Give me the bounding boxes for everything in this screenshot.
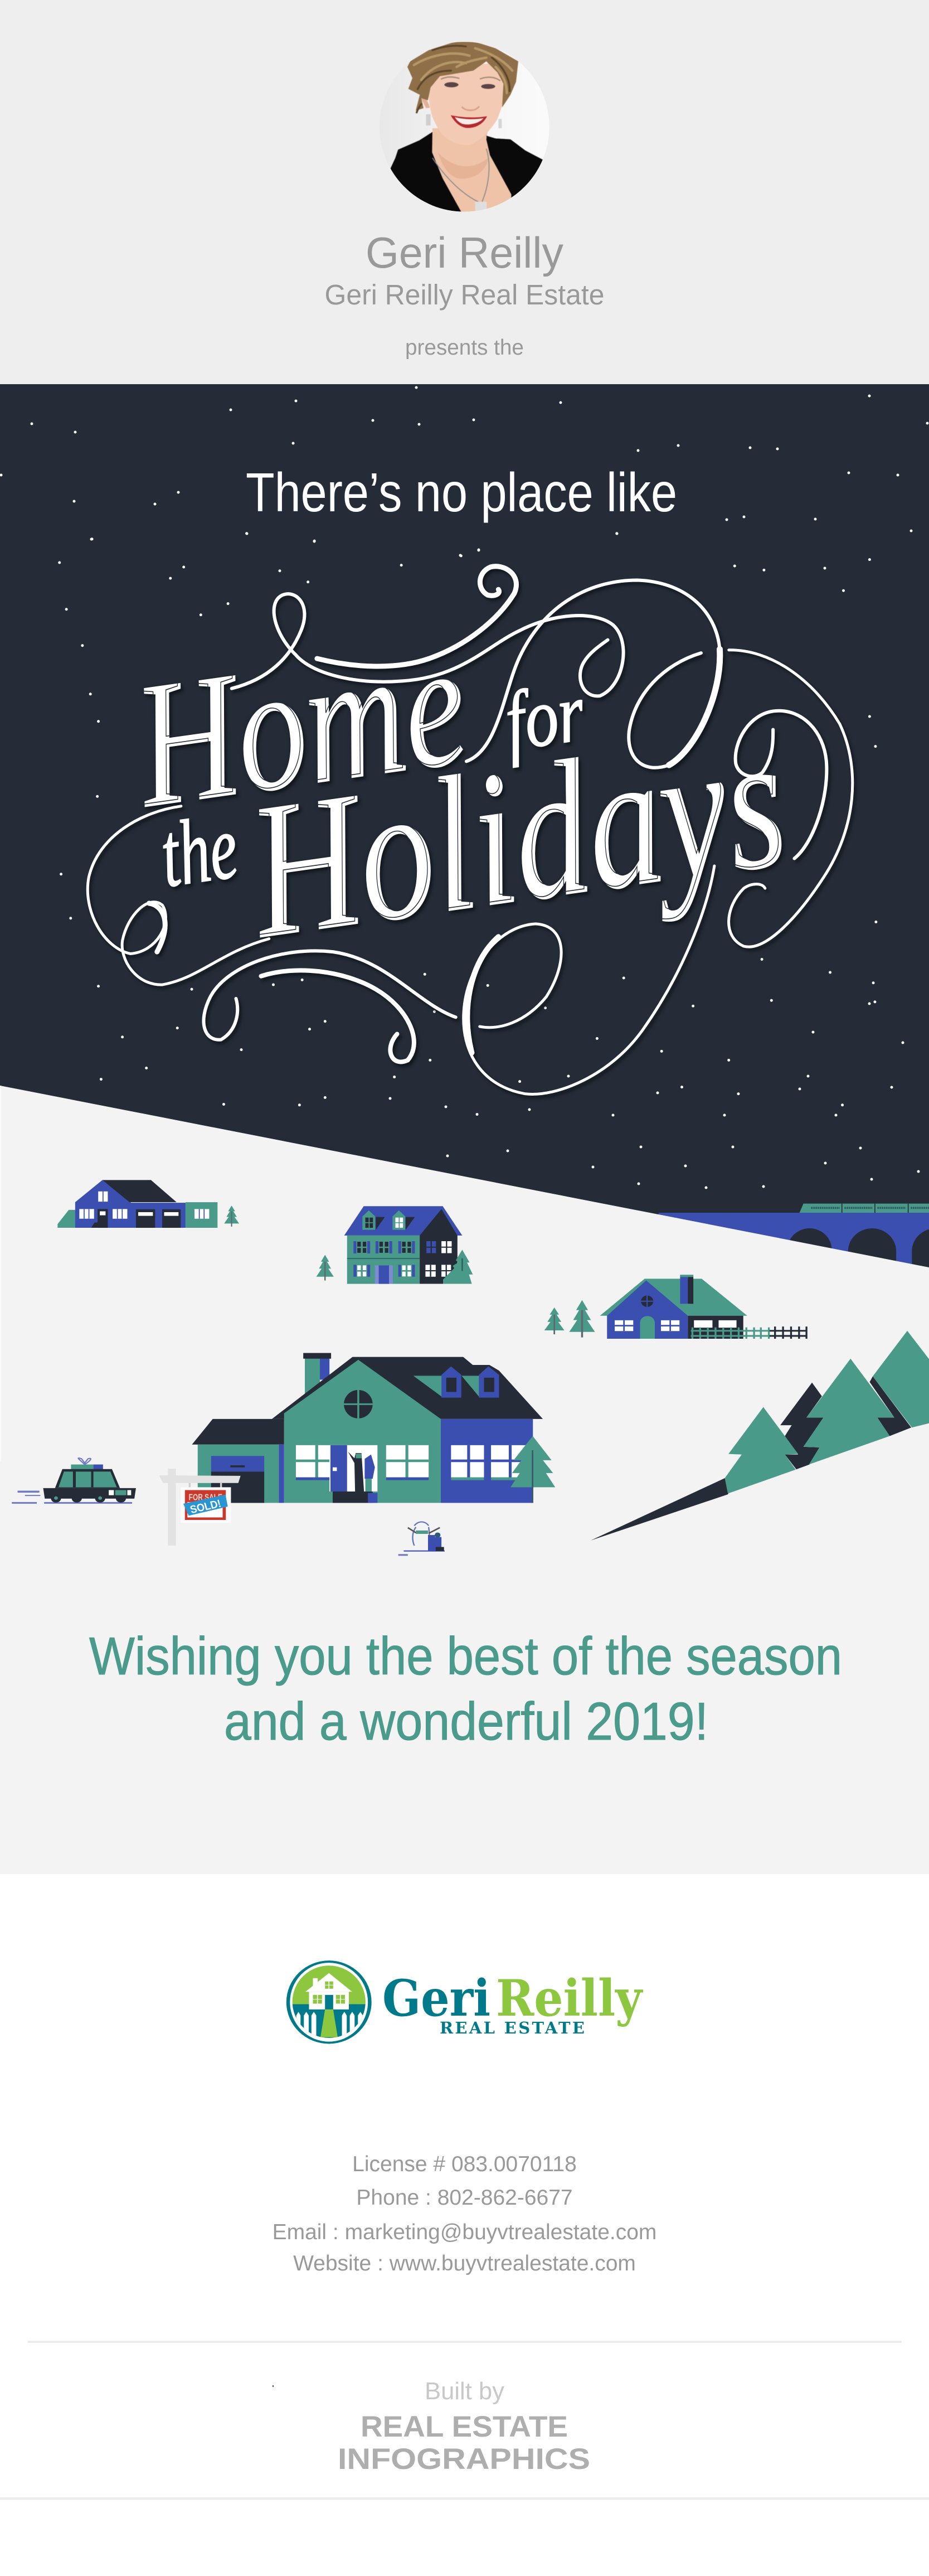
contact details: License # 083.0070118 bbox=[352, 2152, 577, 2176]
brand: Real Estate Infographics bbox=[338, 2410, 590, 2476]
for sale sign marked sold: FOR SALE bbox=[189, 1493, 222, 1502]
word: the: the bbox=[155, 795, 244, 907]
calligraphic flourishes bbox=[87, 566, 853, 1094]
brand: Real Estate Infographics: REAL ESTATE bbox=[361, 2410, 568, 2443]
engraved inline of Home: Home bbox=[120, 602, 475, 843]
main house with owners bbox=[192, 1353, 543, 1503]
tree by ranch bbox=[224, 1205, 239, 1227]
bridge with train bbox=[659, 1204, 929, 1277]
panel: footer logo bbox=[286, 1960, 643, 2044]
scene: neighbourhood houses bbox=[12, 1180, 555, 1556]
front door and couple bbox=[329, 1445, 377, 1503]
for sale sign marked sold bbox=[159, 1469, 241, 1546]
agency name: Geri Reilly Real Estate bbox=[324, 279, 604, 311]
cottage bbox=[600, 1275, 747, 1339]
agent name: Geri Reilly bbox=[366, 228, 563, 277]
logo wordmark: Reilly: Reilly bbox=[496, 1969, 643, 2028]
greeting message: Wishing you the best of the season bbox=[89, 1626, 842, 1686]
agent portrait photo bbox=[390, 42, 549, 212]
greeting message bbox=[89, 1626, 842, 1751]
contact details: Website : www.buyvtrealestate.com bbox=[293, 2251, 636, 2275]
snowman and child bbox=[398, 1522, 445, 1556]
car with presents bbox=[12, 1458, 136, 1504]
lettering: home for the holidays bbox=[87, 566, 853, 1094]
presents line: presents the bbox=[405, 336, 524, 360]
speed lines bbox=[12, 1490, 132, 1504]
train bbox=[799, 1204, 929, 1213]
logo wordmark: Geri: Geri bbox=[382, 1969, 490, 2028]
brand: Real Estate Infographics: INFOGRAPHICS bbox=[338, 2443, 590, 2476]
house: small blue ranch bbox=[57, 1180, 217, 1228]
hillside pines bbox=[591, 1331, 929, 1541]
for sale sign marked sold: SOLD! bbox=[189, 1498, 222, 1516]
falling snow stars bbox=[1, 388, 927, 1188]
chimney bbox=[303, 1353, 331, 1394]
panel: agent header bbox=[0, 0, 929, 384]
garage door bbox=[211, 1456, 264, 1503]
front windows bbox=[296, 1445, 527, 1480]
trees by cottage bbox=[544, 1300, 595, 1338]
contact details: Phone : 802-862-6677 bbox=[356, 2186, 573, 2210]
scene: cottage and hillside bbox=[544, 1275, 929, 1541]
logo emblem bbox=[286, 1960, 372, 2044]
word: for: for bbox=[499, 666, 590, 768]
presents on roof bbox=[71, 1458, 103, 1470]
tree beside main house bbox=[510, 1436, 555, 1503]
house: colonial bbox=[344, 1206, 473, 1284]
panel: night sky bbox=[0, 384, 929, 1276]
necklace bbox=[432, 149, 489, 202]
built by credit bbox=[338, 2378, 590, 2476]
facial features bbox=[441, 77, 500, 81]
hair bbox=[407, 42, 518, 110]
word: Home: Home bbox=[123, 604, 478, 845]
panel: snowy ground bbox=[0, 1086, 929, 1874]
greeting message: and a wonderful 2019! bbox=[224, 1692, 708, 1751]
contact details: Email : marketing@buyvtrealestate.com bbox=[273, 2220, 656, 2244]
contact details bbox=[273, 2152, 656, 2275]
logo wordmark: Real Estate: REAL ESTATE bbox=[440, 2018, 585, 2037]
viaduct bbox=[659, 1213, 929, 1277]
tree beside colonial bbox=[317, 1255, 334, 1281]
tagline: there's no place like: There’s no place like bbox=[246, 462, 677, 523]
built by credit: Built by bbox=[425, 2378, 504, 2405]
picket fence bbox=[691, 1326, 807, 1339]
round attic window bbox=[344, 1390, 373, 1418]
